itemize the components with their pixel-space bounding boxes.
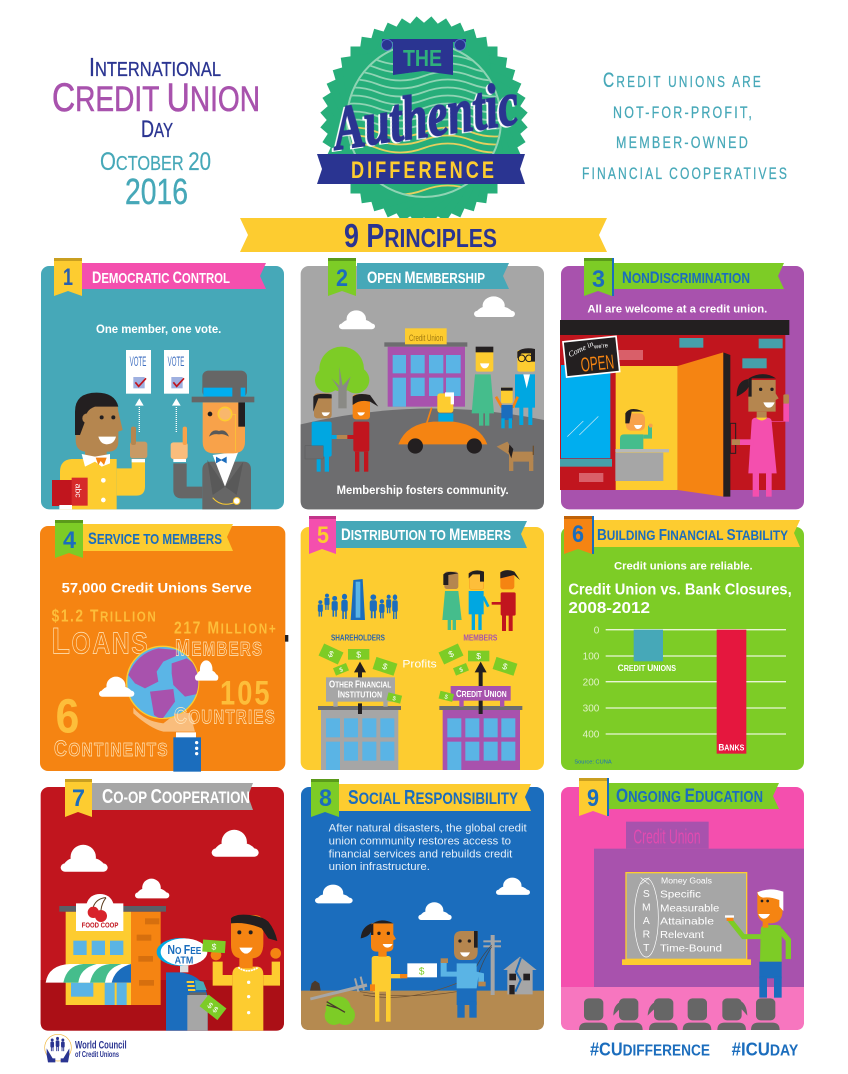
chalkboard: R (643, 930, 650, 941)
food coop store: FOOD COOP (82, 921, 118, 930)
heading: 4 Service to members (55, 520, 233, 558)
panel 2: Open Membership: Membership fosters community. (337, 483, 509, 497)
teller at counter (615, 409, 669, 481)
chalkboard: Time-Bound (660, 944, 722, 955)
ballots and arrows: VOTE (130, 353, 146, 369)
money bills: $ (476, 651, 481, 661)
stat: countries (174, 674, 276, 729)
handshake couple (305, 393, 378, 472)
stat: loans: LOANS (52, 620, 149, 662)
ballots and arrows (126, 350, 189, 432)
stat: members: 217 MILLION+ (174, 617, 277, 637)
open sign: we're (593, 343, 609, 351)
money bills: $ (327, 648, 335, 660)
chart title: Credit Union vs. Bank Closures, (568, 581, 792, 598)
man with top hat (171, 371, 254, 509)
stat: loans (52, 606, 157, 662)
banner: 9 Principles (240, 217, 607, 254)
other financial institution building: OTHER FINANCIAL (329, 679, 391, 690)
chalkboard: M (642, 903, 651, 914)
chalkboard: S (643, 889, 650, 900)
man receiving check (441, 931, 486, 1018)
heading: 5 Distribution to Members (309, 516, 527, 554)
heading: 6 Building Financial Stability (564, 516, 800, 554)
panel 6: Building Financial Stability (561, 516, 804, 770)
bar chart: closures: 400 (583, 730, 600, 741)
labels: Profits (402, 659, 437, 671)
heading: 4 Service to members: 4 (63, 527, 77, 554)
audience silhouettes (579, 998, 780, 1030)
ribbon: Difference (317, 154, 525, 184)
credit union building: CREDIT UNION (456, 689, 507, 700)
heading: 2 Open Membership: OPEN MEMBERSHIP (367, 268, 485, 287)
heading: 5 Distribution to Members: DISTRIBUTION TO MEMBERS (341, 525, 511, 544)
heading: 6 Building Financial Stability: 6 (572, 521, 584, 548)
storm damage (310, 935, 501, 1025)
damaged house (503, 957, 537, 994)
atm with sign: ATM (175, 955, 193, 966)
check: $ (419, 966, 425, 977)
panel 9: Ongoing Education: Credit Union (633, 826, 701, 848)
heading: 6 Building Financial Stability: BUILDING FINANCIAL STABILITY (597, 527, 789, 544)
panel 5: Distribution to Members (301, 516, 544, 770)
panel 7: Co-op Cooperation (41, 779, 284, 1031)
paragraph: union infrastructure. (329, 861, 430, 873)
chart title (568, 581, 792, 617)
stat: loans: $1.2 TRILLION (52, 606, 157, 626)
panel 2: Open Membership (301, 258, 544, 509)
credit union building (439, 662, 522, 770)
title: International Credit Union Day: OCTOBER 20 (100, 148, 211, 176)
hashtags (590, 1039, 799, 1060)
chalkboard: A (643, 916, 650, 927)
chalkboard: Specific (660, 890, 701, 901)
text block: credit union definition: NOT-FOR-PROFIT, (613, 103, 754, 122)
stat: continents: 6 (56, 690, 79, 744)
teacher (725, 889, 788, 998)
credit union building: Credit Union (409, 333, 443, 343)
text block: credit union definition: CREDIT UNIONS ARE (603, 69, 763, 92)
credit union building (384, 328, 467, 407)
stat: members (174, 617, 277, 660)
paragraph: After natural disasters, the global credit (329, 823, 527, 835)
family (472, 347, 535, 428)
atm with sign: NO FEE (167, 943, 202, 957)
chalkboard: Attainable (660, 917, 714, 928)
bar chart: closures: 100 (583, 652, 600, 663)
panel 9: Ongoing Education (561, 778, 804, 1030)
chalkboard (622, 873, 751, 965)
title: International Credit Union Day: 2016 (125, 171, 188, 212)
heading: 5 Distribution to Members: 5 (317, 522, 329, 549)
ribbon: Difference: DIFFERENCE (351, 157, 497, 184)
heading: 1 Democratic Control: DEMOCRATIC CONTROL (92, 268, 230, 287)
stat: members: MEMBERS (175, 634, 263, 660)
storefront (560, 320, 789, 497)
chart title: 2008-2012 (568, 600, 650, 617)
money bills: $ (356, 649, 361, 659)
text block: credit union definition (582, 69, 789, 183)
bar chart: closures: BANKS (718, 743, 745, 753)
open sign: Come in (567, 339, 595, 359)
paragraph: union community restores access to (329, 836, 511, 848)
heading: 7 Co-op Cooperation (65, 779, 253, 817)
money bills: $ (381, 661, 389, 672)
money bills: $ (392, 696, 397, 703)
heading: 7 Co-op Cooperation: 7 (72, 785, 85, 812)
stat: countries: COUNTRIES (174, 703, 276, 729)
bar chart: closures: 200 (583, 677, 600, 688)
panel 3: NonDiscrimination: All are welcome at a credit union. (587, 303, 767, 315)
stat: continents: CONTINENTS (54, 736, 169, 761)
ballots and arrows: VOTE (168, 353, 184, 369)
chalkboard: Money Goals (661, 877, 712, 886)
stat: countries: 105 (220, 674, 272, 712)
other financial institution building: INSTITUTION (338, 690, 382, 701)
heading: 3 NonDiscrimination: NONDISCRIMINATION (622, 268, 750, 287)
panel 8: Social Responsibility (301, 779, 544, 1030)
title: International Credit Union Day (52, 52, 260, 212)
heading: 8 Social Responsibility (311, 779, 531, 817)
script word: Authentic: Authentic (326, 70, 523, 164)
bar chart: closures: 300 (583, 704, 600, 715)
title: International Credit Union Day: INTERNATIONAL (89, 52, 221, 82)
stat: continents (54, 690, 169, 761)
woman in pink dress (732, 374, 789, 497)
clouds (99, 660, 218, 697)
atm with sign (157, 938, 226, 1031)
globe in hand (127, 646, 202, 772)
labels: MEMBERS (463, 634, 498, 643)
man with book (52, 393, 147, 509)
heading: 9 Ongoing Education: 9 (587, 785, 599, 812)
shareholders and tower (318, 579, 398, 620)
bar chart: closures: CREDIT UNIONS (618, 663, 677, 673)
heading: 2 Open Membership (328, 258, 509, 296)
dog (497, 442, 533, 471)
woman with money (202, 915, 281, 1031)
title: International Credit Union Day: CREDIT UNION (52, 76, 260, 120)
heading: 4 Service to members: SERVICE TO MEMBERS (88, 529, 222, 548)
text block: credit union definition: MEMBER-OWNED (616, 133, 750, 152)
heading: 2 Open Membership: 2 (336, 265, 348, 292)
panel 1: Democratic Control (41, 258, 284, 509)
clouds (61, 830, 259, 898)
panel 3: NonDiscrimination (560, 258, 804, 509)
clouds (339, 296, 515, 329)
other financial institution building (318, 662, 401, 770)
paragraph: financial services and rebuilds credit (329, 848, 512, 860)
panel 4: Service to members (40, 520, 288, 772)
car with driver (398, 392, 487, 454)
banner: 9 Principles: 9 PRINCIPLES (344, 217, 497, 254)
atm with sign: $ $ (206, 1001, 220, 1015)
labels (331, 634, 498, 671)
column capital: The (382, 39, 466, 75)
money bills: $ (447, 648, 455, 660)
open sign: OPEN (580, 351, 615, 377)
badge: The Authentic Difference (317, 16, 528, 224)
paragraph (329, 823, 527, 873)
labels: SHAREHOLDERS (331, 634, 386, 643)
panel 4: Service to members: 57,000 Credit Unions Serve (62, 579, 252, 595)
heading: 8 Social Responsibility: SOCIAL RESPONSIBILITY (348, 787, 519, 809)
money bills: $ (444, 694, 449, 701)
woman with money: $ (211, 942, 217, 952)
logo: World Council of Credit Unions: World Council (75, 1039, 127, 1051)
food coop store (46, 894, 166, 1005)
heading: 3 NonDiscrimination: 3 (592, 266, 605, 293)
heading: 1 Democratic Control: 1 (63, 264, 73, 291)
panel 6: Building Financial Stability: Credit unions are reliable. (614, 560, 753, 572)
clouds (315, 878, 530, 920)
money bills: $ (501, 661, 509, 672)
check (407, 963, 437, 977)
heading: 9 Ongoing Education (579, 778, 779, 816)
bar chart: closures: 0 (594, 626, 600, 637)
chalkboard: Relevant (660, 930, 704, 941)
members group (442, 570, 520, 631)
money bills (319, 643, 517, 704)
panel 1: Democratic Control: One member, one vote. (96, 322, 221, 336)
heading: 7 Co-op Cooperation: CO-OP COOPERATION (102, 786, 250, 808)
open sign (563, 336, 620, 378)
chalkboard: Measurable (660, 903, 720, 914)
man with book: abc (74, 484, 84, 498)
heading: 1 Democratic Control (54, 258, 266, 296)
hashtags: #ICUDAY (732, 1039, 799, 1060)
column capital: The: THE (403, 45, 442, 71)
hashtags: #CUDIFFERENCE (590, 1039, 710, 1060)
money bills: $ (339, 667, 345, 674)
chalkboard: T (643, 943, 650, 954)
logo: World Council of Credit Unions (45, 1034, 127, 1062)
panel 6: Building Financial Stability: Source: CUNA (574, 760, 612, 766)
heading: 3 NonDiscrimination (584, 258, 784, 296)
money bills: $ (459, 667, 465, 674)
heading: 8 Social Responsibility: 8 (319, 785, 332, 812)
title: International Credit Union Day: DAY (141, 116, 173, 143)
woman handing check (361, 920, 407, 1022)
tree (315, 347, 369, 408)
heading: 9 Ongoing Education: ONGOING EDUCATION (616, 786, 763, 807)
bar chart: closures (583, 626, 786, 754)
logo: World Council of Credit Unions: of Credit Unions (75, 1050, 119, 1059)
